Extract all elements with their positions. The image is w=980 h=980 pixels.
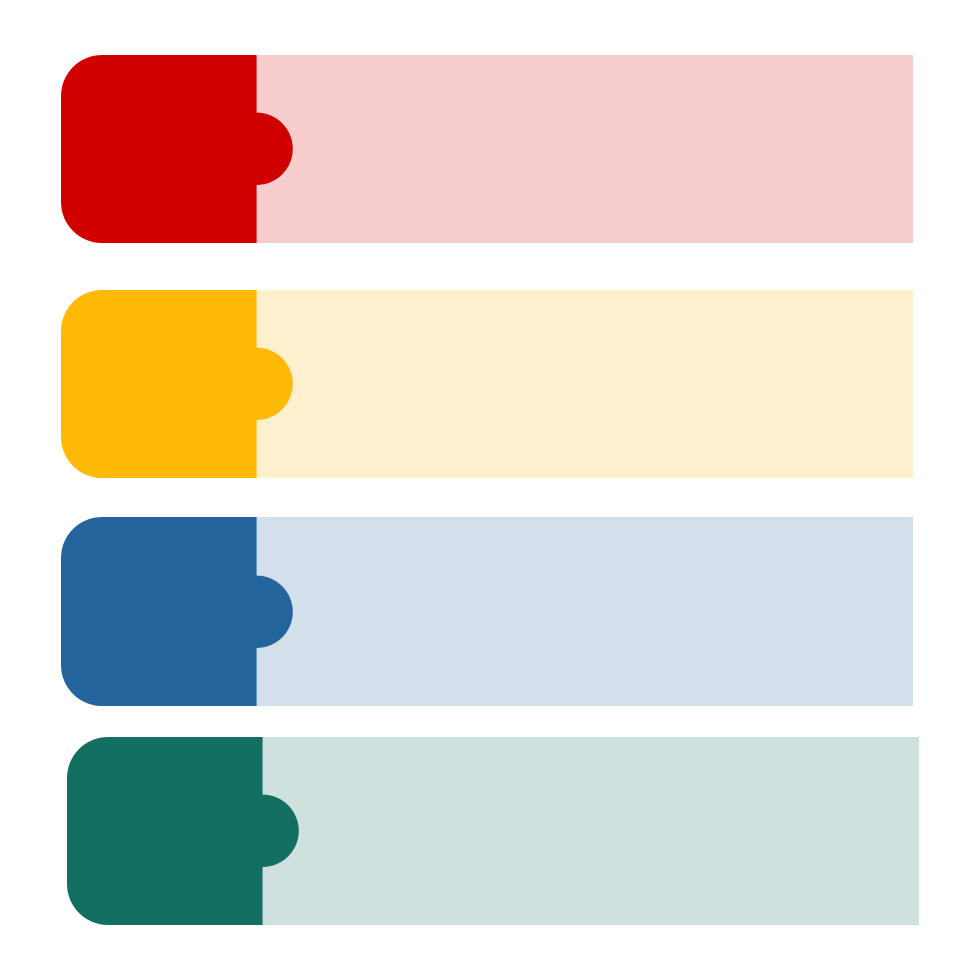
panel: blue banner	[61, 517, 913, 706]
blue banner background	[257, 517, 913, 706]
panel: green banner	[67, 737, 919, 925]
blue puzzle tab	[61, 517, 293, 706]
green banner background	[263, 737, 919, 925]
red puzzle tab	[61, 55, 293, 243]
red banner background	[257, 55, 913, 243]
panel: red banner	[61, 55, 913, 243]
panel: yellow banner	[61, 290, 913, 478]
yellow puzzle tab	[61, 290, 293, 478]
green puzzle tab	[67, 737, 299, 925]
yellow banner background	[257, 290, 913, 478]
